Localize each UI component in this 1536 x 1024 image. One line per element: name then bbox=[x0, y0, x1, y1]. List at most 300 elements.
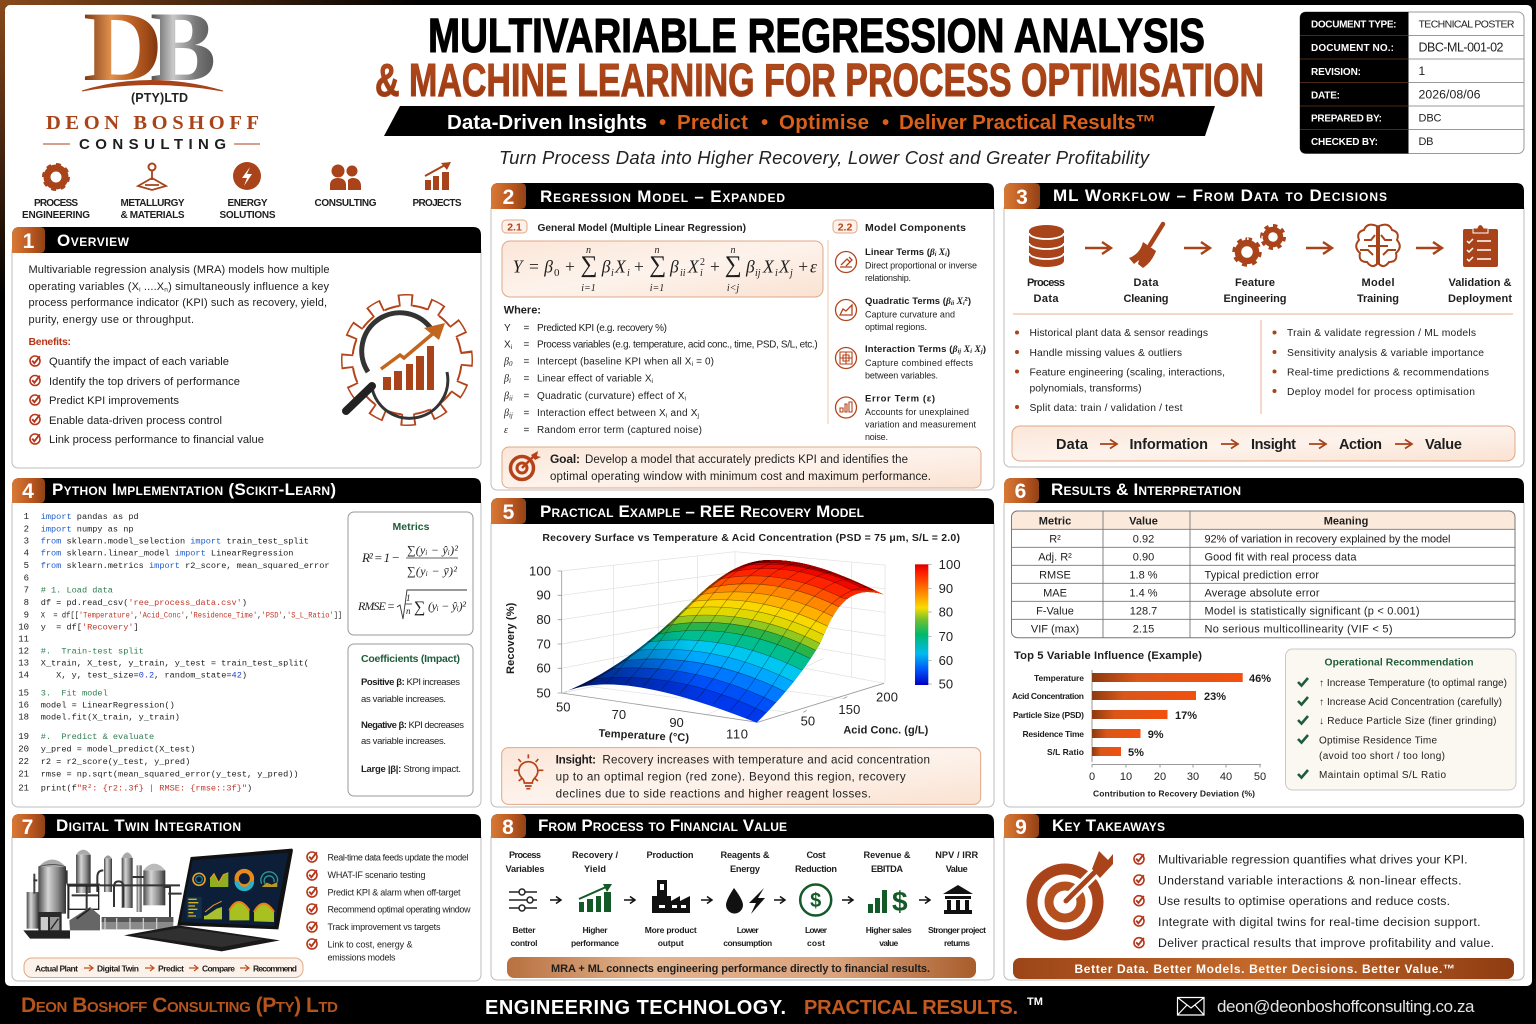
bullet list: left bbox=[1015, 328, 1225, 414]
formula: general model: + bbox=[565, 256, 575, 276]
footer: PRACTICAL RESULTS. bbox=[804, 997, 1018, 1019]
value chain sublabels: cost bbox=[807, 938, 825, 948]
heading: ML workflow: ML Workflow – From Data to Decisions bbox=[1053, 186, 1387, 205]
heading: digital twin: 7 bbox=[22, 816, 33, 839]
heading: regression model: Regression Model – Expanded bbox=[540, 187, 785, 206]
coefficients box bbox=[348, 644, 473, 796]
where list: X bbox=[504, 340, 511, 351]
metrics box: ∑(yᵢ − ȳ)² bbox=[407, 564, 457, 578]
checklist: takeaways bbox=[1134, 852, 1494, 950]
value chain labels: Variables bbox=[506, 864, 544, 874]
metrics box: R² = 1 − bbox=[361, 550, 400, 565]
document control table: DB bbox=[1418, 136, 1434, 148]
icon: process engineering: ENGINEERING bbox=[22, 210, 90, 221]
bullet list: left: Handle missing values & outliers bbox=[1030, 348, 1182, 359]
heading: python: Python Implementation (Scikit-Learn) bbox=[52, 480, 336, 499]
icon: gear with magnifier and chart bbox=[339, 292, 475, 428]
code listing: X_train, X_test, y_train, y_test = train_test_split( bbox=[41, 659, 309, 669]
code listing: import pandas as pd bbox=[41, 512, 139, 522]
bar chart: top 5 variable influence bbox=[1012, 650, 1271, 798]
formula: general model: + bbox=[710, 256, 720, 276]
value chain labels: Process bbox=[509, 850, 541, 860]
goal callout: Goal: bbox=[550, 452, 580, 466]
component: interaction terms: ) bbox=[983, 344, 986, 355]
bar chart: top 5 variable influence: 30 bbox=[1187, 771, 1199, 783]
where list: Quadratic (curvature) effect of X bbox=[537, 391, 684, 402]
code listing: 20 bbox=[18, 744, 29, 754]
footer: Deon Boshoff Consulting (Pty) Ltd bbox=[21, 994, 338, 1017]
heading: key takeaways: 9 bbox=[1015, 816, 1027, 839]
formula: general model: + bbox=[798, 256, 808, 276]
bar chart: top 5 variable influence: 10 bbox=[1120, 771, 1132, 783]
where list bbox=[503, 304, 818, 436]
value chain labels: Yield bbox=[584, 864, 606, 874]
bullet list: left: Split data: train / validation / test bbox=[1030, 403, 1183, 414]
heading: results bbox=[1004, 478, 1524, 503]
tagline bar: • bbox=[659, 111, 666, 134]
step: feature engineering: Feature bbox=[1235, 277, 1275, 289]
text block: intro: ) simultaneously influence a key bbox=[168, 281, 330, 293]
banner: better value: Better Data. Better Models. Better Decisions. Better Value.™ bbox=[1074, 962, 1455, 976]
step: validation and deployment bbox=[1448, 224, 1512, 305]
component: error term: Error Term (ε) bbox=[865, 394, 935, 405]
insight callout: up to an optimal region (red zone). Beyond this region, recovery bbox=[556, 771, 906, 784]
panel: 7 digital twin bbox=[12, 814, 481, 981]
illustration: laptop with dashboard bbox=[124, 849, 293, 951]
operational recommendation box: Operational Recommendation bbox=[1324, 658, 1474, 668]
coefficients box: as variable increases. bbox=[361, 694, 446, 705]
step: validation and deployment: Validation & bbox=[1448, 277, 1512, 289]
step: model training: Model bbox=[1362, 277, 1394, 289]
results table: Model is statistically significant (p < 0.001) bbox=[1204, 605, 1420, 617]
code listing: 10 bbox=[18, 623, 29, 633]
benefits list: Benefits: bbox=[28, 336, 71, 348]
where list: β bbox=[504, 357, 509, 368]
where list: j bbox=[697, 412, 699, 420]
panel: 9 key takeaways bbox=[1004, 814, 1524, 980]
checklist: takeaways: Use results to optimise operations and reduce costs. bbox=[1158, 894, 1450, 908]
goal callout: Develop a model that accurately predicts KPI and identifies the bbox=[585, 454, 908, 466]
code listing: 8 bbox=[24, 598, 29, 608]
service icons row bbox=[22, 162, 462, 221]
value chain labels: Reagents & bbox=[720, 850, 770, 860]
subtitle: Turn Process Data into Higher Recovery, Lower Cost and Greater Profitability bbox=[499, 147, 1151, 168]
tagline bar: Predict bbox=[677, 111, 748, 134]
bar chart: top 5 variable influence: 5% bbox=[1128, 747, 1144, 759]
code listing: 11 bbox=[18, 635, 29, 645]
chart: 3D recovery surface: Recovery Surface vs Temperature & Acid Concentration (PSD = 75 μm, S/L = 2.0) bbox=[542, 533, 960, 544]
subheading 2.1: General Model (Multiple Linear Regression) bbox=[538, 223, 746, 234]
logo: CONSULTING bbox=[79, 136, 226, 153]
code listing: 14 bbox=[18, 671, 29, 681]
bar chart: top 5 variable influence: Acid Concentration bbox=[1012, 691, 1084, 701]
formula: general model: i=1 bbox=[650, 283, 664, 294]
formula: general model: ε bbox=[810, 256, 817, 276]
component: error term: noise. bbox=[865, 432, 888, 442]
bar chart: top 5 variable influence: 46% bbox=[1249, 673, 1271, 685]
component: error term: variation and measurement bbox=[865, 420, 976, 430]
title bbox=[375, 10, 1264, 106]
formula: general model: ij bbox=[755, 268, 761, 279]
code listing: #. Train-test split bbox=[41, 646, 144, 656]
where list: = bbox=[524, 408, 530, 419]
where list: Process variables (e.g. temperature, acid conc., time, PSD, S/L, etc.) bbox=[537, 340, 818, 351]
chart: 3D recovery surface: 100 bbox=[939, 557, 961, 572]
chart: 3D recovery surface: 200 bbox=[876, 690, 898, 705]
where list: = bbox=[524, 323, 530, 334]
code listing: 12 bbox=[18, 646, 29, 656]
code listing: y = df['Recovery'] bbox=[41, 623, 139, 633]
value chain labels: Revenue & bbox=[864, 850, 911, 860]
checklist: digital twin capabilities: Predict KPI & alarm when off-target bbox=[328, 888, 461, 898]
heading: financial value bbox=[491, 814, 994, 839]
step: model training bbox=[1356, 225, 1400, 305]
where list: = bbox=[524, 357, 530, 368]
panel: 3 ML workflow bbox=[1004, 183, 1524, 467]
operational recommendation box bbox=[1286, 649, 1516, 790]
heading: ML workflow bbox=[1004, 183, 1524, 209]
where list: i bbox=[509, 377, 511, 385]
where list: β bbox=[504, 408, 509, 419]
component: interaction terms: ij bbox=[958, 349, 961, 355]
results table: Meaning bbox=[1324, 516, 1368, 528]
metrics box: RMSE = bbox=[357, 599, 395, 613]
benefits list: Identify the top drivers of performance bbox=[49, 376, 240, 388]
heading: financial value: From Process to Financial Value bbox=[538, 816, 787, 835]
code listing: 6 bbox=[24, 573, 29, 583]
document control table bbox=[1300, 12, 1524, 154]
flow: data to value: Data bbox=[1056, 437, 1089, 453]
value chain labels: EBITDA bbox=[871, 864, 903, 874]
operational recommendation box: ↑ Increase Acid Concentration (carefully) bbox=[1319, 697, 1502, 708]
operational recommendation box: Optimise Residence Time bbox=[1319, 736, 1437, 746]
code listing: print(f"R²: {r2:.3f} | RMSE: {rmse::3f}") bbox=[41, 783, 252, 793]
heading: overview: 1 bbox=[23, 230, 35, 253]
flow pill: digital twin steps: Predict bbox=[158, 964, 184, 974]
panel: 2 regression model bbox=[491, 183, 994, 490]
chart: 3D recovery surface: 150 bbox=[838, 702, 860, 717]
component: quadratic terms: ii bbox=[951, 301, 955, 307]
code listing: from sklearn.metrics import r2_score, mean_squared_error bbox=[41, 561, 330, 571]
icon: metallurgy bbox=[120, 164, 185, 221]
flow pill: digital twin steps: Digital Twin bbox=[97, 964, 139, 974]
value chain sublabels: Lower bbox=[805, 925, 828, 935]
chart: 3D recovery surface: Temperature (°C) bbox=[598, 728, 690, 744]
step: feature engineering: Engineering bbox=[1224, 293, 1286, 305]
formula: general model: i bbox=[611, 268, 614, 279]
component: linear terms: Direct proportional or inverse bbox=[865, 260, 977, 270]
metrics box bbox=[348, 512, 473, 635]
step: process data: Data bbox=[1034, 293, 1059, 305]
formula: general model: X bbox=[778, 256, 791, 276]
where list: 0 bbox=[509, 360, 513, 368]
code listing: 2 bbox=[24, 524, 29, 534]
where list: = bbox=[524, 374, 530, 385]
flow pill: digital twin steps bbox=[24, 958, 303, 978]
where list: Intercept (baseline KPI when all X bbox=[537, 357, 691, 368]
bullet list: right bbox=[1272, 328, 1489, 398]
code listing: 21 bbox=[18, 770, 29, 780]
code listing: 16 bbox=[18, 700, 29, 710]
icon: energy solutions: ENERGY bbox=[228, 198, 268, 209]
formula: general model bbox=[502, 241, 823, 297]
value chain sublabels bbox=[510, 925, 986, 948]
subheading 2.2: Model Components bbox=[865, 222, 966, 234]
where list: i bbox=[511, 344, 512, 351]
document control table: DBC bbox=[1418, 112, 1442, 124]
value chain labels: Reduction bbox=[795, 864, 837, 874]
value chain icons: $ bbox=[892, 886, 908, 917]
where list: Linear effect of variable X bbox=[537, 374, 652, 385]
document control table: 1 bbox=[1418, 64, 1426, 78]
results table: Value bbox=[1129, 516, 1158, 528]
component: error term bbox=[836, 394, 976, 442]
operational recommendation box: Maintain optimal S/L Ratio bbox=[1319, 770, 1446, 781]
logo bbox=[43, 0, 260, 153]
value chain labels: Production bbox=[646, 850, 694, 860]
chart: 3D recovery surface: 110 bbox=[726, 726, 748, 741]
code listing: y_pred = model_predict(X_test) bbox=[41, 744, 195, 754]
heading: financial value: 8 bbox=[502, 816, 514, 839]
results table: Average absolute error bbox=[1204, 587, 1320, 599]
tagline bar: Deliver Practical Results™ bbox=[899, 111, 1156, 134]
code listing: rmse = np.sqrt(mean_squared_error(y_test, y_pred)) bbox=[41, 770, 299, 780]
where list: ε bbox=[504, 425, 508, 436]
code listing: df = pd.read_csv('ree_process_data.csv') bbox=[41, 598, 247, 608]
value chain sublabels: Stronger project bbox=[928, 925, 986, 935]
chart: 3D recovery surface: 50 bbox=[939, 677, 953, 692]
document control table: CHECKED BY: bbox=[1311, 137, 1378, 148]
chart: 3D recovery surface: 50 bbox=[536, 685, 551, 700]
chart: 3D recovery surface: Recovery (%) bbox=[505, 602, 517, 674]
formula: general model: n bbox=[586, 245, 591, 256]
value chain labels: Cost bbox=[806, 850, 826, 860]
benefits list: Link process performance to financial value bbox=[49, 434, 264, 446]
code listing: 19 bbox=[18, 732, 29, 742]
coefficients box: Positive β: KPI increases bbox=[361, 677, 460, 688]
bar chart: top 5 variable influence: 23% bbox=[1204, 691, 1226, 703]
bar chart: top 5 variable influence: Residence Time bbox=[1022, 729, 1084, 739]
code listing: r2 = r2_score(y_test, y_pred) bbox=[41, 757, 190, 767]
checklist: digital twin capabilities: Link to cost, energy & bbox=[328, 940, 412, 950]
where list: i bbox=[652, 378, 653, 385]
banner: better value bbox=[1013, 958, 1514, 979]
component: interaction terms: i bbox=[970, 349, 972, 355]
component: linear terms: i bbox=[935, 252, 937, 258]
component: linear terms: X bbox=[936, 248, 947, 258]
operational recommendation box: ↓ Reduce Particle Size (finer grinding) bbox=[1319, 716, 1496, 727]
flow: data to value bbox=[1012, 426, 1515, 461]
step: data cleaning: Data bbox=[1134, 277, 1159, 289]
logo: (PTY)LTD bbox=[131, 91, 188, 105]
component: linear terms bbox=[836, 247, 977, 283]
results table: 2.15 bbox=[1133, 623, 1154, 635]
bar chart: top 5 variable influence: 50 bbox=[1254, 771, 1266, 783]
tagline bar: • bbox=[882, 111, 889, 134]
chart: 3D recovery surface: 60 bbox=[939, 653, 953, 668]
where list: β bbox=[504, 374, 509, 385]
bullet list: right: Deploy model for process optimisation bbox=[1287, 387, 1475, 398]
results table: 0.92 bbox=[1133, 533, 1154, 545]
icon: process engineering: PROCESS bbox=[34, 198, 78, 209]
component: interaction terms bbox=[836, 344, 986, 381]
results table: 128.7 bbox=[1130, 605, 1157, 617]
heading: overview bbox=[12, 227, 481, 253]
text block: intro: process performance indicator (KPI) such as recovery, yield, bbox=[28, 297, 327, 309]
where list: Interaction effect between X bbox=[537, 408, 666, 419]
heading: regression model bbox=[491, 183, 994, 209]
flow: data to value: Action bbox=[1339, 437, 1382, 453]
footer: ENGINEERING TECHNOLOGY. bbox=[485, 997, 786, 1019]
bar chart: top 5 variable influence: Particle Size (PSD) bbox=[1013, 710, 1084, 720]
code listing: 18 bbox=[18, 712, 29, 722]
coefficients box: as variable increases. bbox=[361, 736, 446, 747]
formula: general model: i<j bbox=[727, 283, 739, 294]
component: interaction terms: Interaction Terms (β bbox=[865, 344, 957, 355]
code listing: 3. Fit model bbox=[41, 688, 108, 698]
code listing: 5 bbox=[24, 561, 29, 571]
checklist: takeaways: Understand variable interactions & non-linear effects. bbox=[1158, 874, 1462, 888]
code listing: model.fit(X_train, y_train) bbox=[41, 712, 180, 722]
panel: 6 results bbox=[1004, 478, 1524, 807]
bullet list: right: Sensitivity analysis & variable importance bbox=[1287, 348, 1484, 359]
where list: i bbox=[692, 361, 693, 368]
formula: general model: i bbox=[700, 268, 703, 279]
panel: 8 process to financial value bbox=[491, 814, 994, 980]
heading: python: 4 bbox=[22, 480, 34, 503]
subheading 2.2: 2.2 bbox=[838, 222, 852, 234]
checklist: digital twin capabilities: Recommend optimal operating window bbox=[328, 904, 471, 914]
formula: general model: i bbox=[627, 268, 630, 279]
component: quadratic terms: i bbox=[963, 301, 965, 307]
component: linear terms: Linear Terms (β bbox=[865, 247, 935, 258]
metrics box: (yᵢ − ŷᵢ)² bbox=[428, 599, 466, 613]
formula: general model: Y bbox=[513, 256, 525, 276]
code listing: model = LinearRegression() bbox=[41, 700, 175, 710]
footer: deon@deonboshoffconsulting.co.za bbox=[1217, 997, 1475, 1016]
value chain sublabels: Higher sales bbox=[866, 925, 912, 935]
icon: target with arrow bbox=[1032, 851, 1113, 935]
results table: 0.90 bbox=[1133, 551, 1154, 563]
heading: results: Results & Interpretation bbox=[1051, 480, 1241, 499]
results table: No serious multicollinearity (VIF < 5) bbox=[1204, 623, 1392, 635]
checklist: digital twin capabilities: Track improvement vs targets bbox=[328, 922, 441, 932]
document control table: PREPARED BY: bbox=[1311, 114, 1382, 124]
metrics box: 1 bbox=[406, 593, 410, 603]
metrics box: ∑(yᵢ − ŷᵢ)² bbox=[407, 543, 458, 557]
flow: data to value: Information bbox=[1130, 437, 1208, 453]
code listing: 21 bbox=[18, 783, 29, 793]
icon: projects: PROJECTS bbox=[412, 198, 462, 209]
checklist: digital twin capabilities: Real-time data feeds update the model bbox=[328, 852, 468, 862]
insight callout: Recovery increases with temperature and acid concentration bbox=[602, 753, 930, 766]
panel: 4 python implementation bbox=[12, 478, 481, 807]
formula: general model: X bbox=[687, 256, 700, 276]
document control table: DOCUMENT TYPE: bbox=[1311, 20, 1396, 30]
code listing: X, y, test_size=0.2, random_state=42) bbox=[41, 671, 247, 681]
chart: 3D recovery surface: 50 bbox=[801, 713, 815, 728]
text block: intro: operating variables (X bbox=[28, 281, 139, 293]
checklist: digital twin capabilities: WHAT-IF scenario testing bbox=[328, 870, 426, 880]
illustration: plant bbox=[23, 850, 182, 939]
formula: general model: 2 bbox=[700, 257, 705, 268]
component: quadratic terms: ²) bbox=[965, 296, 971, 307]
where list: ii bbox=[509, 394, 513, 402]
benefits list: Predict KPI improvements bbox=[49, 395, 179, 407]
benefits list: Enable data-driven process control bbox=[49, 415, 222, 427]
formula: general model: β bbox=[745, 256, 755, 276]
panel: 5 practical example bbox=[491, 498, 994, 807]
where list: Predicted KPI (e.g. recovery %) bbox=[537, 323, 667, 334]
bullet list: left: Historical plant data & sensor readings bbox=[1030, 328, 1208, 339]
formula: general model: X bbox=[762, 256, 775, 276]
chart: 3D recovery surface: 60 bbox=[536, 661, 551, 676]
step: model training: Training bbox=[1357, 293, 1399, 305]
formula: general model: β bbox=[601, 256, 611, 276]
icon: consulting: CONSULTING bbox=[314, 198, 377, 209]
flow: data to value: Insight bbox=[1251, 437, 1296, 453]
component: interaction terms: j bbox=[980, 349, 983, 355]
text block: intro: i bbox=[139, 286, 141, 294]
icon: energy solutions bbox=[220, 162, 276, 221]
bar chart: top 5 variable influence: 9% bbox=[1148, 729, 1164, 741]
value chain sublabels: output bbox=[658, 938, 684, 948]
value chain sublabels: consumption bbox=[723, 938, 772, 948]
results table: 1.4 % bbox=[1129, 587, 1158, 599]
value chain labels: Recovery / bbox=[572, 850, 618, 860]
tagline bar bbox=[384, 106, 1215, 136]
value chain sublabels: Lower bbox=[737, 925, 759, 935]
formula: general model: ∑ bbox=[649, 252, 666, 278]
chart: 3D recovery surface: 80 bbox=[536, 612, 551, 627]
heading: practical example bbox=[491, 498, 994, 524]
where list: = 0) bbox=[693, 357, 714, 368]
checklist: digital twin capabilities bbox=[307, 852, 471, 962]
banner: MRA + ML bbox=[507, 957, 976, 978]
tagline bar: Optimise bbox=[779, 111, 869, 134]
component: quadratic terms: Capture curvature and bbox=[865, 309, 955, 319]
heading: key takeaways: Key Takeaways bbox=[1052, 816, 1165, 835]
step: data cleaning: Cleaning bbox=[1124, 293, 1168, 305]
heading: ML workflow: 3 bbox=[1016, 186, 1028, 209]
formula: general model: i=1 bbox=[581, 283, 596, 294]
heading: digital twin: Digital Twin Integration bbox=[56, 816, 241, 835]
value chain sublabels: Higher bbox=[582, 925, 608, 935]
heading: regression model: 2 bbox=[503, 186, 514, 209]
operational recommendation box: ↑ Increase Temperature (to optimal range) bbox=[1319, 678, 1507, 689]
bar chart: top 5 variable influence: 40 bbox=[1220, 771, 1232, 783]
value chain sublabels: value bbox=[879, 938, 898, 948]
coefficients box: Large |β|: Strong impact. bbox=[361, 764, 461, 775]
coefficients box: Negative β: KPI decreases bbox=[361, 720, 464, 731]
code listing: from sklearn.model_selection import train_test_split bbox=[41, 536, 309, 546]
bar chart: top 5 variable influence: S/L Ratio bbox=[1047, 747, 1084, 757]
document control table: REVISION: bbox=[1311, 67, 1361, 78]
chart: 3D recovery surface: 80 bbox=[939, 605, 953, 620]
component: quadratic terms: X bbox=[954, 297, 965, 307]
logo: DEON BOSHOFF bbox=[46, 112, 259, 134]
component: linear terms: i bbox=[945, 252, 947, 258]
value chain icons: $ bbox=[810, 890, 821, 912]
text block: intro: n bbox=[164, 286, 168, 294]
value chain labels bbox=[506, 850, 979, 874]
document control table: DOCUMENT NO.: bbox=[1311, 43, 1394, 54]
code listing: 22 bbox=[18, 757, 29, 767]
formula: general model: n bbox=[730, 245, 736, 256]
value chain labels: Value bbox=[946, 864, 968, 874]
bullet list: right: Train & validate regression / ML models bbox=[1287, 328, 1476, 339]
results table: Metric bbox=[1039, 516, 1071, 528]
